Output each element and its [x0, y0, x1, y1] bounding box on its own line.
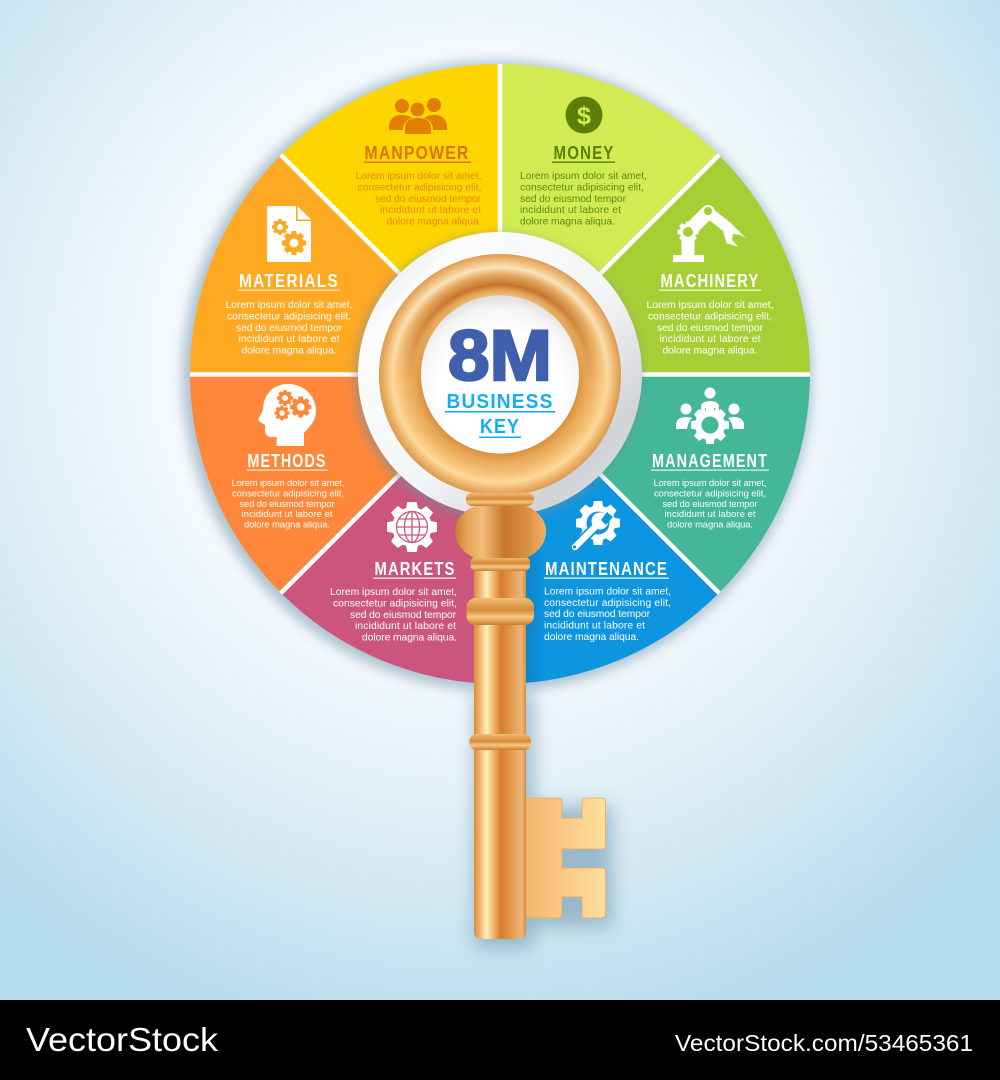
text block: management: incididunt ut labore et [664, 508, 756, 519]
subtitle: business: BUSINESS [446, 391, 554, 413]
text block: markets [330, 587, 457, 644]
text block: methods [232, 477, 344, 530]
footer bar [0, 1000, 1000, 1080]
icon: dollar coin: $ [577, 102, 591, 130]
heading: management: MANAGEMENT [652, 451, 768, 471]
segment: maintenance [500, 374, 719, 684]
segment: machinery [500, 155, 810, 374]
segment: management [500, 374, 810, 593]
segment: methods [190, 374, 500, 593]
heading: money: MONEY [554, 143, 614, 163]
text block: materials [226, 300, 352, 357]
icon: document with gears [267, 206, 311, 262]
key collar: lower [470, 734, 531, 750]
text block: methods: incididunt ut labore et [242, 508, 333, 519]
text block: materials: Lorem ipsum dolor sit amet, [226, 300, 352, 311]
text block: money [520, 171, 647, 228]
text block: maintenance: incididunt ut labore et [544, 620, 645, 632]
segment: markets [281, 374, 500, 684]
segment: materials [190, 155, 500, 374]
text block: management [654, 477, 766, 530]
heading: materials: MATERIALS [239, 271, 339, 291]
centre plate [354, 232, 642, 521]
text block: manpower: dolore magna aliqua. [386, 217, 482, 228]
text block: money: consectetur adipisicing elit, [520, 182, 644, 193]
text block: maintenance: consectetur adipisicing elit, [544, 598, 671, 609]
lens with title [421, 296, 579, 454]
key collar: middle [466, 598, 534, 625]
text block: manpower: consectetur adipisicing elit, [358, 182, 482, 193]
text block: management: Lorem ipsum dolor sit amet, [654, 477, 766, 488]
text block: methods: dolore magna aliqua. [244, 518, 330, 530]
text block: machinery: incididunt ut labore et [660, 334, 761, 345]
text block: markets: dolore magna aliqua. [362, 632, 457, 644]
key bow ring [379, 254, 621, 496]
icon: dollar coin [566, 96, 602, 134]
text block: maintenance [544, 586, 671, 643]
subtitle: key: KEY [480, 416, 520, 438]
text block: manpower: sed do eiusmod tempor [375, 194, 482, 205]
text block: methods: consectetur adipisicing elit, [232, 488, 344, 498]
panel: materials [190, 155, 500, 374]
text block: money: Lorem ipsum dolor sit amet, [520, 171, 647, 182]
text block: machinery: sed do eiusmod tempor [657, 323, 764, 334]
text block: maintenance: dolore magna aliqua. [544, 632, 639, 643]
heading: methods: METHODS [248, 451, 326, 471]
panel: maintenance [500, 374, 719, 684]
text block: maintenance: Lorem ipsum dolor sit amet, [544, 586, 671, 598]
text block: markets: consectetur adipisicing elit, [333, 598, 457, 609]
text block: materials: consectetur adipisicing elit, [227, 311, 351, 322]
wheel shadow [182, 61, 812, 691]
heading: markets: MARKETS [374, 559, 456, 579]
footer url: VectorStock.com/53465361 [675, 1030, 973, 1056]
key neck [466, 493, 534, 506]
text block: manpower: incididunt ut labore et [380, 205, 481, 216]
key collar: upper [470, 557, 530, 571]
icon: globe gear [387, 502, 437, 552]
icon: team gear [676, 388, 744, 444]
icon: robot arm [673, 207, 746, 262]
key shadow [474, 690, 612, 948]
text block: materials: sed do eiusmod tempor [236, 323, 343, 334]
segment: money [500, 64, 719, 374]
text block: management: sed do eiusmod tempor [662, 498, 758, 509]
text block: markets: sed do eiusmod tempor [350, 610, 457, 621]
heading: maintenance: MAINTENANCE [545, 559, 668, 579]
icon: people [389, 98, 447, 134]
text block: money: incididunt ut labore et [520, 205, 621, 216]
text block: materials: dolore magna aliqua. [242, 346, 336, 357]
soft shadow on wheel [526, 553, 538, 683]
panel: management [500, 374, 810, 593]
icon: head with gears [258, 384, 316, 446]
golden key [379, 254, 621, 939]
text block: money: sed do eiusmod tempor [520, 194, 627, 205]
heading: machinery: MACHINERY [660, 271, 760, 291]
text block: methods: sed do eiusmod tempor [240, 498, 334, 509]
panel: markets [281, 374, 500, 684]
text block: materials: incididunt ut labore et [238, 334, 340, 345]
text block: machinery: Lorem ipsum dolor sit amet, [646, 300, 774, 311]
key ball [455, 505, 546, 558]
text block: markets: Lorem ipsum dolor sit amet, [330, 587, 457, 598]
heading: manpower: MANPOWER [364, 143, 470, 163]
footer logo: VectorStock [26, 1021, 219, 1058]
text block: methods: Lorem ipsum dolor sit amet, [232, 477, 344, 488]
text block: money: dolore magna aliqua. [520, 217, 615, 228]
panel: methods [190, 374, 500, 593]
key bit [526, 798, 606, 918]
key shaft [474, 560, 526, 939]
panel: machinery [500, 155, 810, 374]
text block: machinery: consectetur adipisicing elit, [648, 311, 772, 322]
segment: manpower [281, 64, 500, 374]
text block: machinery [646, 300, 774, 357]
text block: machinery: dolore magna aliqua. [662, 346, 758, 357]
icon: wrench gear [573, 501, 620, 549]
text block: maintenance: sed do eiusmod tempor [544, 609, 651, 620]
panel: manpower [281, 64, 500, 374]
panel: money [500, 64, 719, 374]
text block: manpower [356, 171, 482, 228]
text block: markets: incididunt ut labore et [355, 621, 456, 632]
text block: manpower: Lorem ipsum dolor sit amet, [356, 171, 482, 182]
text block: management: dolore magna aliqua. [667, 518, 753, 530]
text block: management: consectetur adipisicing elit, [654, 488, 766, 498]
title: 8M: 8M [448, 317, 552, 396]
